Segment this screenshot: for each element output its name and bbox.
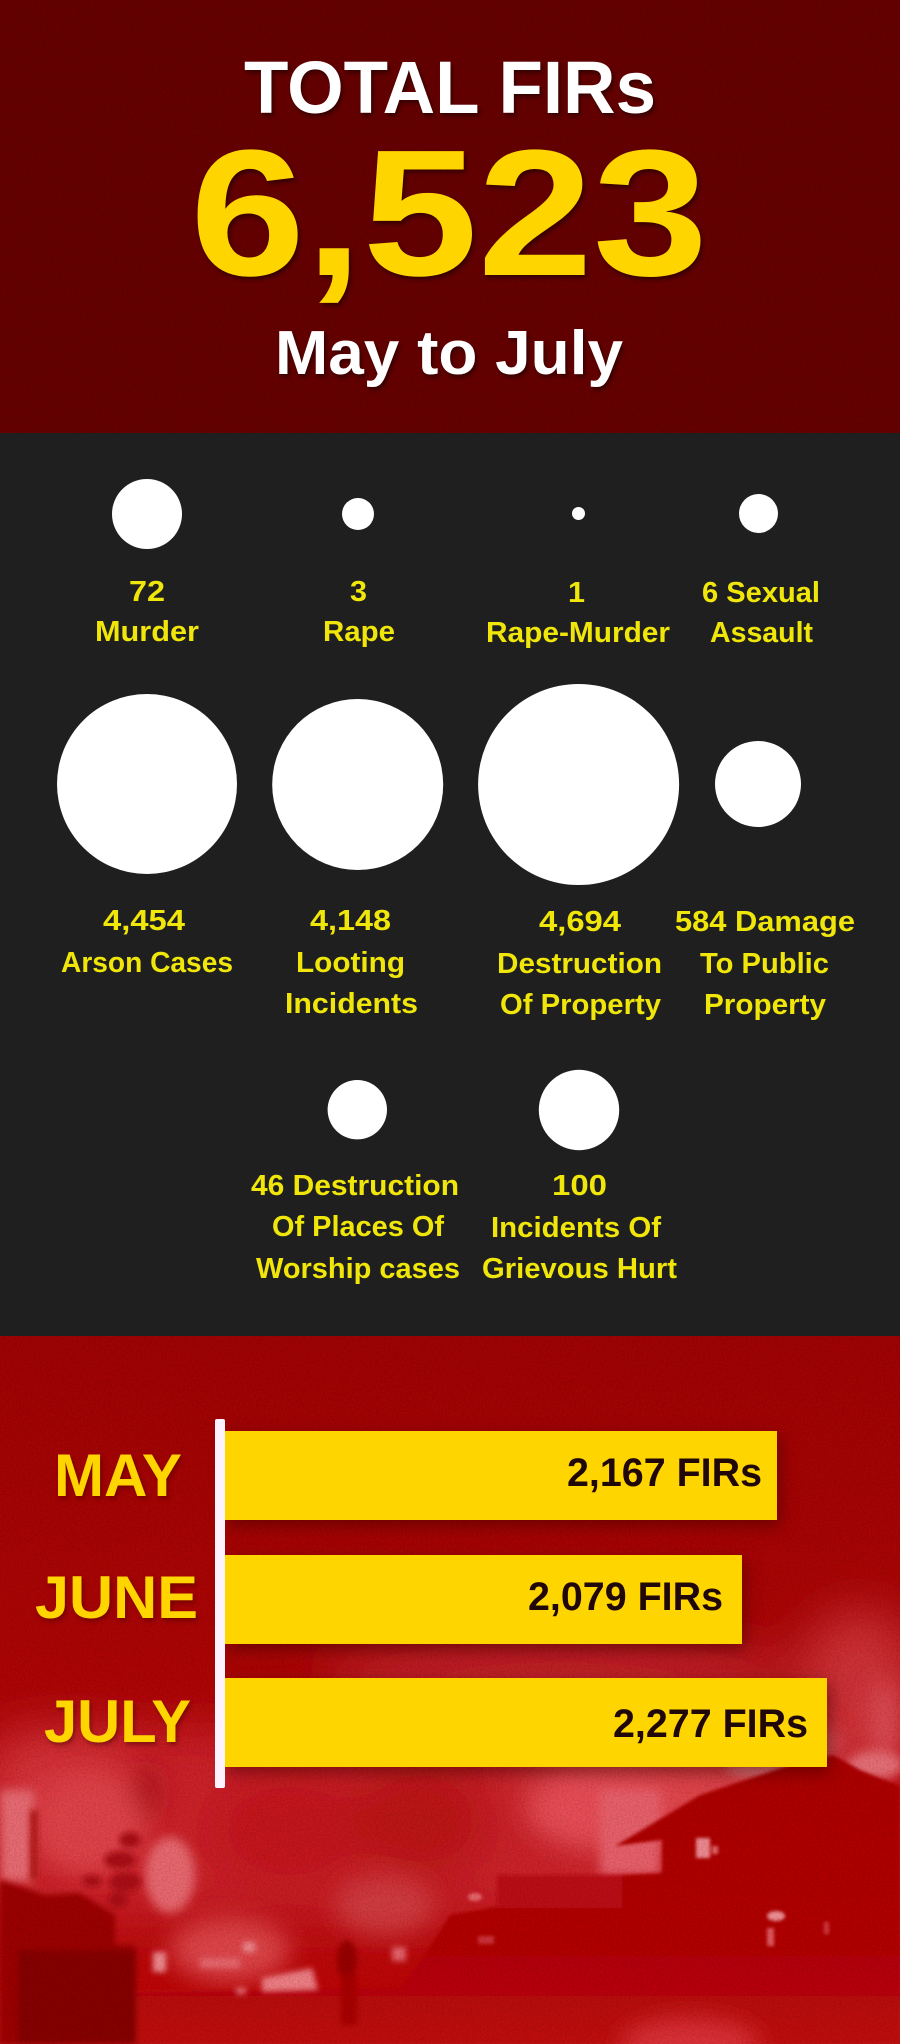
stat: sexual assault: Assault	[710, 617, 813, 649]
stat: arson: 4,454	[103, 905, 185, 937]
stat: sexual assault: 6 Sexual	[702, 577, 820, 609]
stat: rape	[323, 498, 395, 648]
bar: May: 2,167 FIRs	[567, 1451, 762, 1495]
stat: places of worship: Of Places Of	[272, 1211, 444, 1243]
stat: arson: Arson Cases	[61, 947, 233, 979]
bar: June: JUNE	[35, 1564, 198, 1631]
stat: destruction of property: Of Property	[500, 989, 661, 1021]
stat: murder: Murder	[95, 616, 199, 648]
stat: damage to public property	[675, 741, 855, 1021]
stat: grievous hurt: Incidents Of	[491, 1212, 661, 1244]
panel: header	[0, 0, 900, 433]
stat: destruction of property: 4,694	[539, 906, 621, 938]
bar: June	[35, 1555, 742, 1644]
image: burning village	[0, 1336, 900, 2044]
heading: total FIRs: TOTAL FIRs	[244, 46, 656, 129]
silhouette: house	[135, 1755, 900, 2044]
stat: destruction of property	[478, 684, 679, 1021]
stat: rape-murder: 1	[568, 577, 585, 609]
stat: damage to public property: Property	[704, 989, 826, 1021]
stat: sexual assault	[702, 494, 820, 649]
stat: looting: 4,148	[310, 905, 391, 937]
stat: places of worship: 46 Destruction	[251, 1170, 459, 1202]
subheading: period: May to July	[275, 319, 624, 388]
stat: murder	[95, 479, 199, 648]
stat: looting	[272, 699, 443, 1020]
stat: rape: Rape	[323, 616, 395, 648]
panel: crime categories	[0, 433, 900, 1336]
bar: July: JULY	[44, 1688, 191, 1755]
stat: looting: Incidents	[285, 988, 418, 1020]
panel: monthly FIRs	[0, 1336, 900, 2044]
stat: looting: Looting	[296, 947, 405, 979]
stat: rape-murder	[486, 507, 670, 649]
stat: rape-murder: Rape-Murder	[486, 617, 670, 649]
stat: murder: 72	[129, 576, 165, 608]
bar: June: 2,079 FIRs	[528, 1575, 723, 1619]
bar: May	[54, 1431, 777, 1520]
stat: grievous hurt: 100	[552, 1170, 607, 1202]
stat: places of worship: Worship cases	[256, 1253, 460, 1285]
stat: rape: 3	[350, 576, 367, 608]
stat: damage to public property: 584 Damage	[675, 906, 855, 938]
stat: grievous hurt: Grievous Hurt	[482, 1253, 677, 1285]
stat: places of worship	[251, 1080, 460, 1285]
bar: May: MAY	[54, 1442, 182, 1509]
chart axis	[215, 1419, 225, 1788]
stat: grievous hurt	[482, 1070, 677, 1285]
stat: arson	[57, 694, 237, 979]
big number: 6,523	[190, 113, 708, 314]
bar: July: 2,277 FIRs	[613, 1702, 808, 1746]
stat: destruction of property: Destruction	[497, 948, 662, 980]
stat: damage to public property: To Public	[700, 948, 829, 980]
bar: July	[44, 1678, 827, 1767]
